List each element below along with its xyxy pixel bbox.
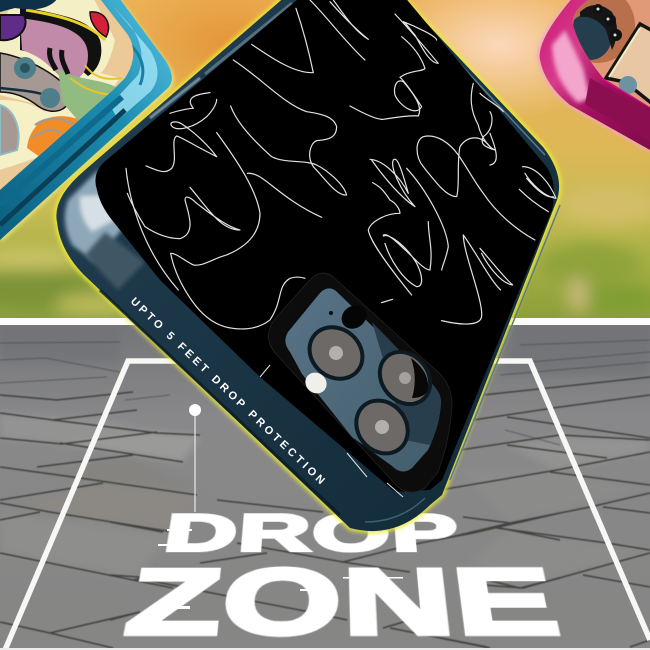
yellow glow	[56, 0, 559, 531]
case artwork: abstract figure	[572, 0, 650, 104]
protection text along phone edge: UPTO 5 FEET DROP PROTECTION	[128, 296, 327, 487]
case artwork: psychedelic swirls	[0, 0, 122, 170]
bumper case	[56, 0, 559, 531]
callout dot and leader line	[189, 404, 201, 512]
bumper highlight, left corner	[65, 170, 128, 262]
lens bottom	[343, 387, 421, 467]
line art around camera	[260, 365, 403, 497]
drop zone heading: DROP	[160, 505, 463, 562]
flash	[301, 368, 331, 398]
white line art	[126, 0, 556, 329]
camera plate	[285, 288, 441, 472]
main phone	[56, 0, 560, 531]
camera black frame	[268, 273, 452, 492]
side phone: pink case, right	[537, 0, 650, 152]
pavement stones	[0, 325, 650, 585]
side phone: blue case, left	[0, 0, 174, 243]
bottom highlights	[365, 498, 425, 522]
microphone hole	[337, 301, 371, 333]
lens right	[367, 339, 443, 417]
camera module	[268, 273, 452, 492]
lens top	[296, 314, 376, 392]
black back panel with line art	[95, 0, 554, 492]
bottom white edge	[0, 648, 650, 650]
horizon white line	[0, 318, 650, 325]
drop zone white outline	[5, 361, 650, 650]
drop zone heading	[119, 505, 569, 650]
pavement cracks	[0, 377, 650, 648]
